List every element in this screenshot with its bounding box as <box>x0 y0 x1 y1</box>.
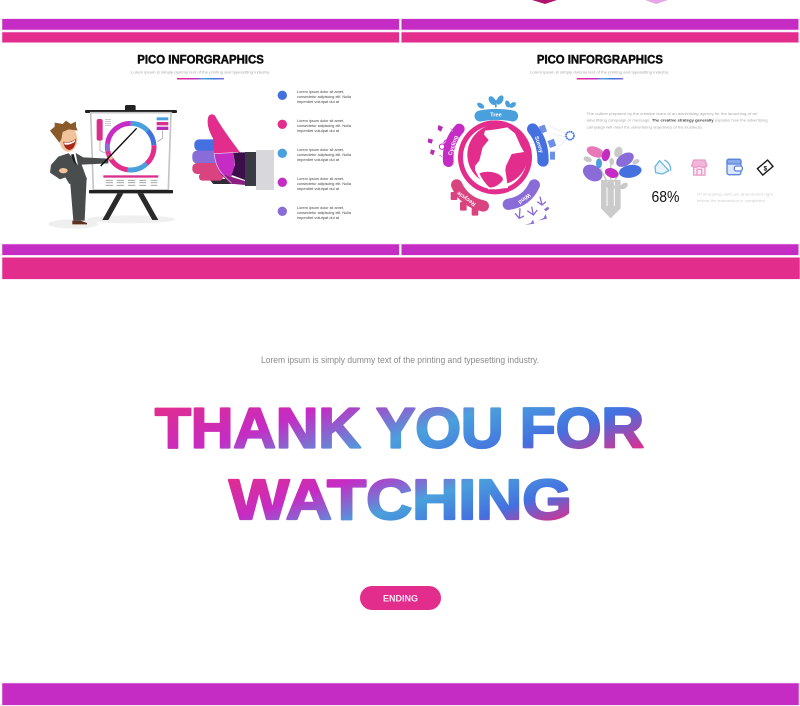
bullet 5: imperdiet volutpat dui at <box>297 215 340 220</box>
bullet 4: imperdiet volutpat dui at <box>297 186 340 191</box>
leaves <box>580 144 643 191</box>
icon: bicycles and birds <box>428 125 453 157</box>
text block: advertising paragraph <box>587 111 768 129</box>
panel: left slide heading <box>131 52 270 80</box>
icon fragments: cropped shapes at top edge <box>532 0 668 4</box>
icon: shop <box>692 160 707 175</box>
illustration: presenter and board <box>48 105 177 229</box>
bottom band: slide dividers <box>2 244 800 279</box>
bullet 1: Lorem ipsum dolor sit amet, <box>297 89 344 94</box>
globe <box>458 120 532 194</box>
bullet 3: Lorem ipsum dolor sit amet, <box>297 147 344 152</box>
title: PICO INFORGRAPHICS <box>137 52 264 66</box>
bullet 1: consectetur adipiscing elit. Nulla <box>297 94 352 99</box>
subtitle: Lorem ipsum is simply dummy text of the printing and typesetting industry. <box>530 69 669 74</box>
heading: thank you for watching: THANK YOU FOR <box>155 397 644 461</box>
text block: stat description: Of shopping carts are abandoned right <box>697 192 774 196</box>
chart: globe with five themed arcs <box>428 94 574 225</box>
icon: tree sprouts <box>476 94 517 110</box>
arc labels <box>448 112 544 207</box>
text block: stat description <box>697 192 774 203</box>
stat: 68 percent: 68% <box>652 189 680 206</box>
bullet 3 <box>278 147 352 162</box>
illustration: leaf tree growing from pencil <box>580 144 643 218</box>
bullet 5: consectetur adipiscing elit. Nulla <box>297 210 352 215</box>
icon: banknote: $ <box>763 165 767 172</box>
bullet 2: consectetur adipiscing elit. Nulla <box>297 123 352 128</box>
top band: right slide <box>401 19 799 43</box>
arcs <box>448 114 543 206</box>
title: PICO INFORGRAPHICS <box>537 52 663 66</box>
presenter <box>50 121 113 224</box>
arc labels: Cycling <box>448 135 460 156</box>
board <box>85 105 177 220</box>
text block: advertising paragraph: campaign will meet the advertising objectives of the business. <box>587 124 703 129</box>
bullet 3: imperdiet volutpat dui at <box>297 157 340 162</box>
underline <box>177 78 224 80</box>
bullet 4: consectetur adipiscing elit. Nulla <box>297 181 352 186</box>
icon: sun and solar panels <box>539 125 574 160</box>
bullet 4: Lorem ipsum dolor sit amet, <box>297 176 344 181</box>
button: ending <box>360 586 441 610</box>
footer band <box>2 683 799 705</box>
text block: stat description: before the transaction is completed. <box>697 198 766 203</box>
bullet 2: Lorem ipsum dolor sit amet, <box>297 118 344 123</box>
bullet 2: imperdiet volutpat dui at <box>297 128 340 133</box>
text block: ending tagline: Lorem ipsum is simply dummy text of the printing and typesetting industry. <box>261 355 539 365</box>
pointer <box>101 128 137 166</box>
board details <box>97 117 168 185</box>
bullet 1: imperdiet volutpat dui at <box>297 99 340 104</box>
icon: wallet <box>727 159 742 175</box>
heading: thank you for watching: WATCHING <box>229 468 572 532</box>
button: ending: ENDING <box>383 593 418 604</box>
arc labels: Wind <box>516 192 531 205</box>
list: five lorem ipsum bullets <box>278 89 352 220</box>
arc labels: Recycle <box>456 190 477 207</box>
panel: right slide heading <box>530 52 669 80</box>
ground shadows <box>48 215 175 229</box>
icon: wind turbines <box>515 197 549 225</box>
bullet 5: Lorem ipsum dolor sit amet, <box>297 205 344 210</box>
pencil <box>600 165 622 218</box>
illustration: thumbs up hand <box>192 114 274 190</box>
icon: recycle bins <box>451 192 478 216</box>
bullet 3: consectetur adipiscing elit. Nulla <box>297 152 352 157</box>
bullet 1 <box>278 89 352 104</box>
bullet 4 <box>278 176 352 191</box>
donut chart <box>107 123 154 170</box>
arc labels: Sunny <box>533 136 544 155</box>
icon row <box>655 159 773 175</box>
heading: thank you for watching <box>155 397 644 532</box>
bullet 2 <box>278 118 352 133</box>
underline <box>577 78 623 80</box>
arc labels: Tree <box>490 112 502 118</box>
bullet 5 <box>278 205 352 220</box>
top band: left slide <box>2 19 399 43</box>
subtitle: Lorem ipsum is simply dummy text of the printing and typesetting industry. <box>131 69 270 74</box>
icon: speaker <box>655 160 671 174</box>
text block: advertising paragraph: advertising campaign or message. The creative strategy generally explains how the advertising <box>587 118 768 122</box>
text block: advertising paragraph: The outline prepared by the creative team of an advertising agency for the launching of an <box>587 111 757 116</box>
